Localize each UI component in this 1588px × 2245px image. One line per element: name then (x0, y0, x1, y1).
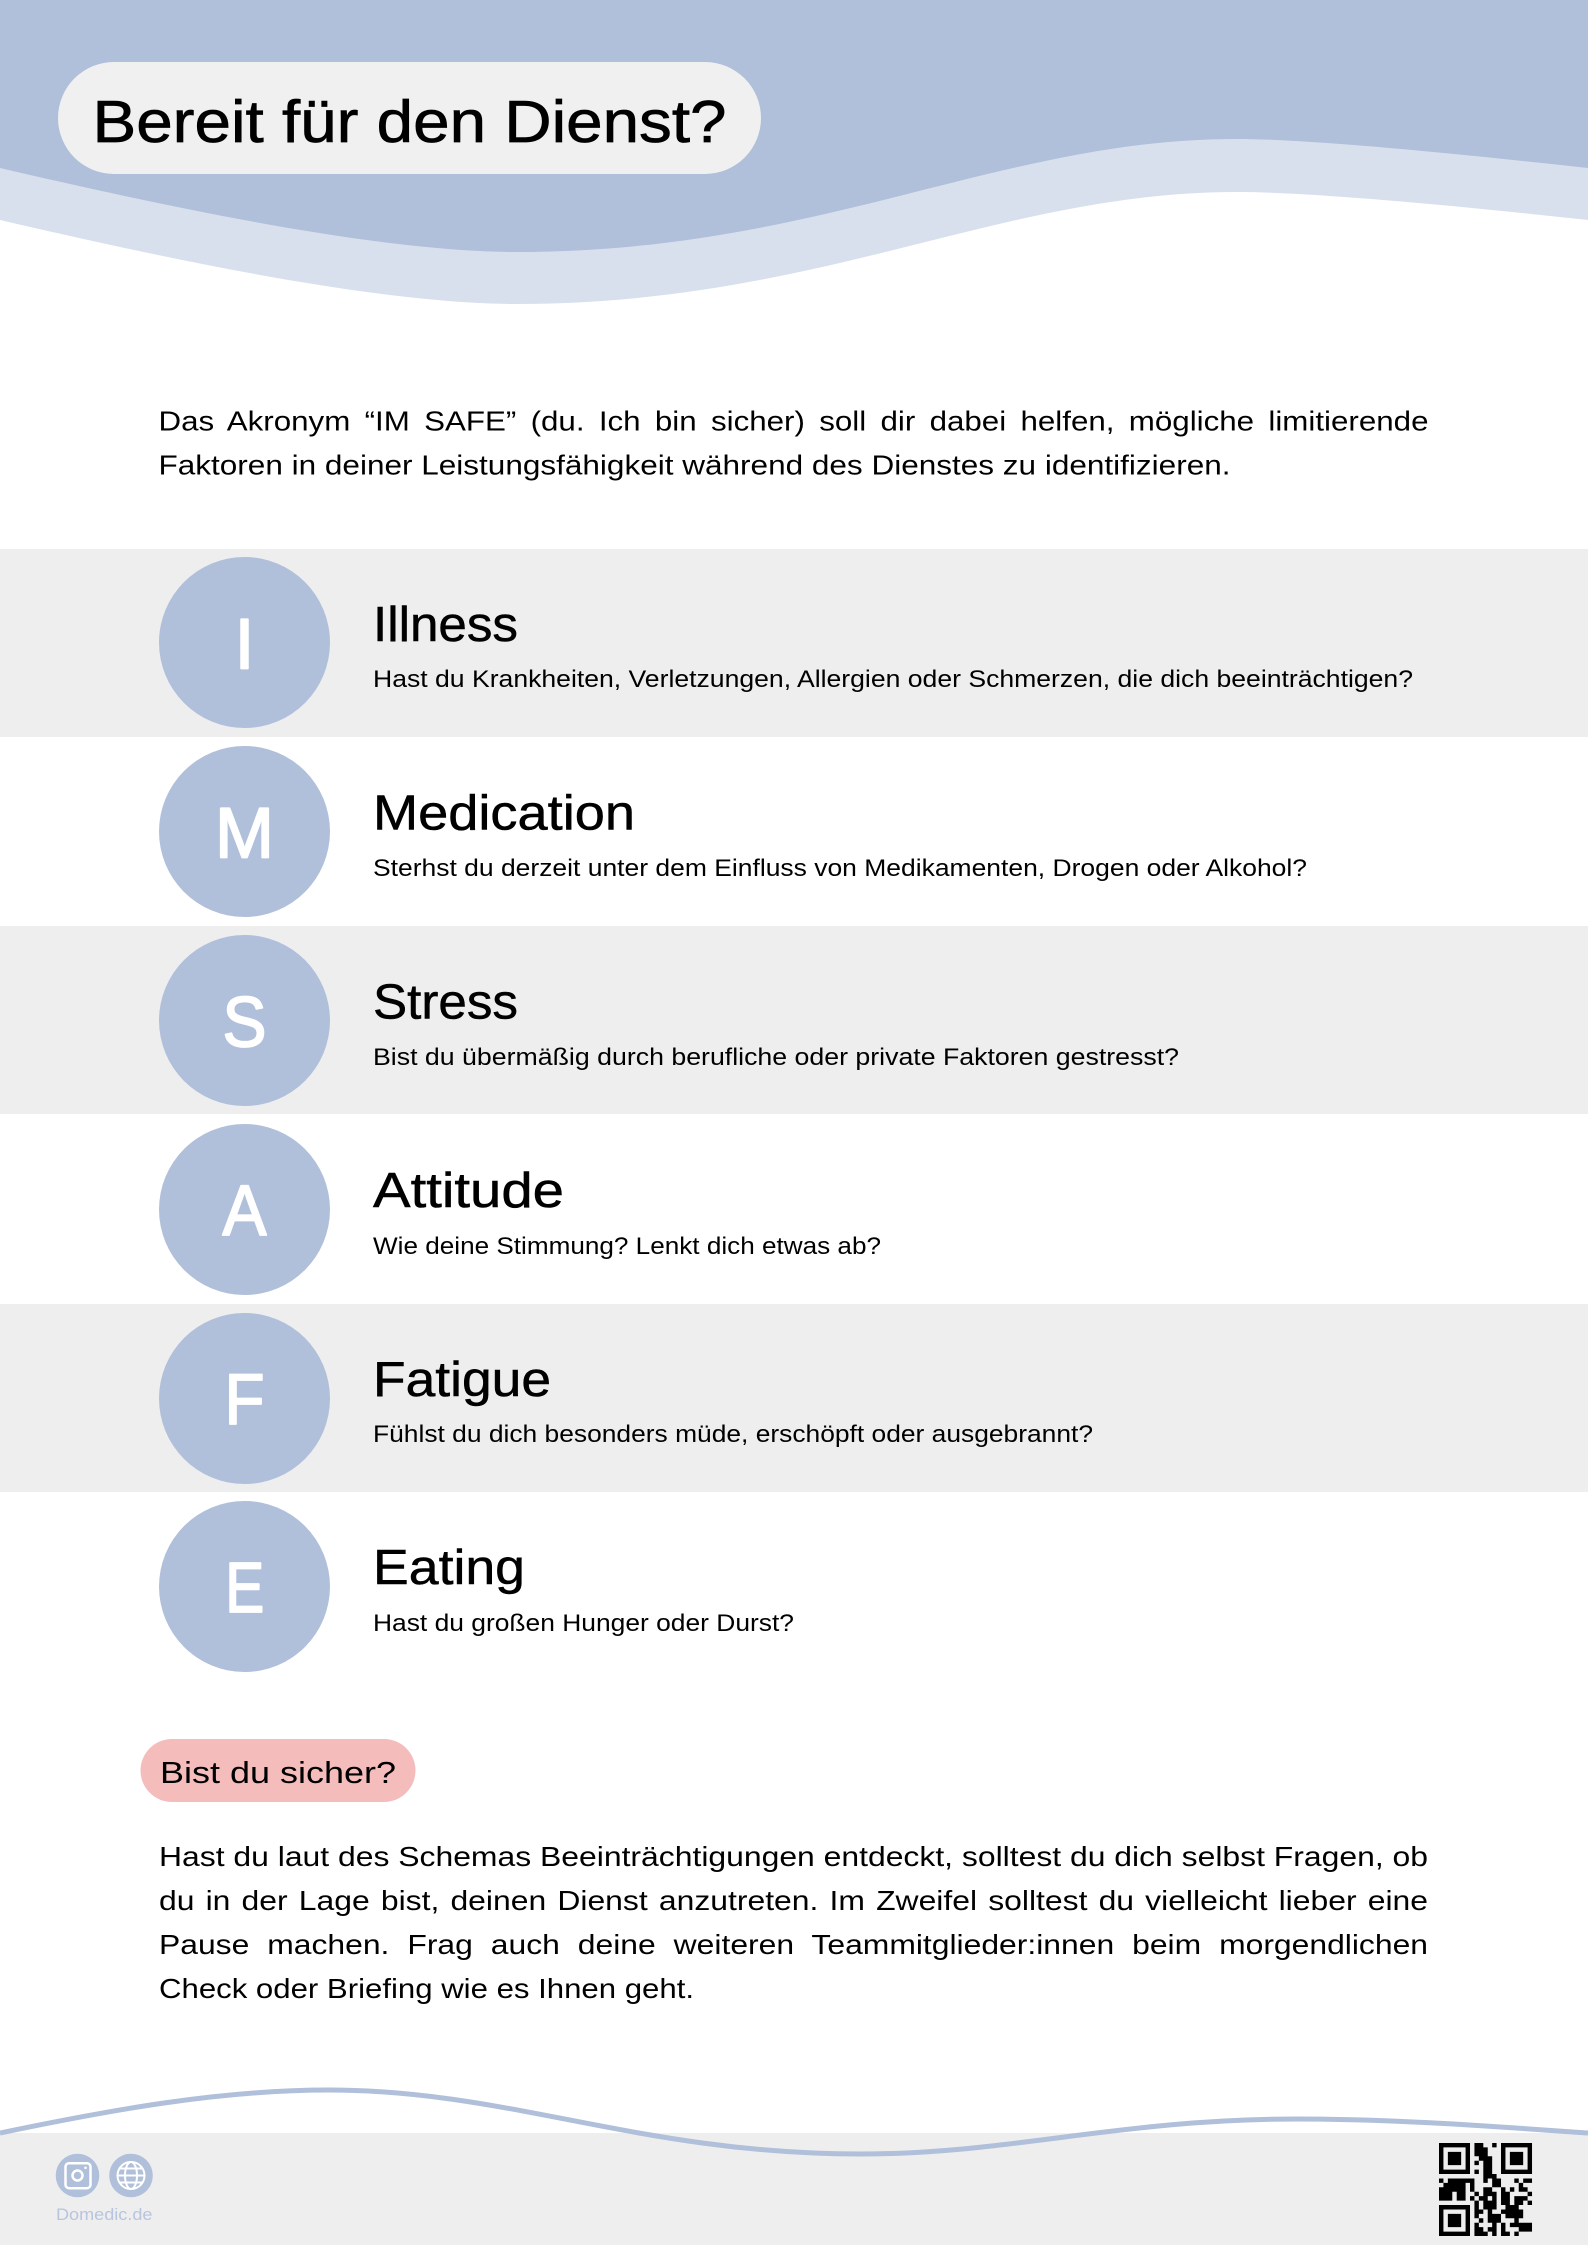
panel: Illness row (0, 549, 1588, 737)
title pill (58, 62, 761, 174)
closing text block: Pause machen. Frag auch deine weiteren Teammitglieder:innen beim morgendlichen (159, 1929, 1428, 1960)
callout pill: Bist du sicher? (140, 1739, 416, 1802)
footer band (0, 2133, 1588, 2245)
website label: Domedic.de (56, 2205, 152, 2224)
panel: Fatigue row: F (224, 1361, 264, 1440)
title pill: Bereit für den Dienst? (92, 89, 726, 155)
callout pill: Bist du sicher?: Bist du sicher? (160, 1755, 396, 1790)
panel: Eating row: Eating (373, 1541, 525, 1595)
closing text block (159, 1841, 1428, 2004)
panel: Medication row (159, 746, 1307, 917)
panel: Eating row: E (225, 1549, 264, 1628)
intro text (158, 406, 1428, 480)
header wave background (0, 0, 1588, 304)
panel: Stress row: S (222, 984, 266, 1062)
panel: Illness row: Hast du Krankheiten, Verletzungen, Allergien oder Schmerzen, die dich beeinträchtigen? (373, 666, 1413, 693)
panel: Fatigue row: Fühlst du dich besonders müde, erschöpft oder ausgebrannt? (373, 1421, 1093, 1448)
intro text: Faktoren in deiner Leistungsfähigkeit während des Dienstes zu identifizieren. (158, 450, 1230, 480)
panel: Medication row: M (215, 794, 274, 874)
closing text block: du in der Lage bist, deinen Dienst anzutreten. Im Zweifel solltest du vielleicht lieber eine (159, 1885, 1428, 1916)
panel: Stress row (0, 926, 1588, 1114)
panel: Eating row (159, 1501, 794, 1672)
panel: Attitude row: A (222, 1172, 267, 1251)
panel: Illness row: I (235, 606, 254, 684)
panel: Medication row: Medication (373, 786, 635, 840)
QR code (1439, 2143, 1532, 2236)
panel: Attitude row: Wie deine Stimmung? Lenkt dich etwas ab? (373, 1233, 881, 1260)
panel: Fatigue row (0, 1304, 1588, 1492)
panel: Stress row: Bist du übermäßig durch berufliche oder private Faktoren gestresst? (373, 1044, 1179, 1071)
icon: globe (109, 2154, 153, 2197)
panel: Stress row: Stress (373, 976, 518, 1030)
panel: Attitude row: Attitude (373, 1164, 564, 1218)
panel: Eating row: Hast du großen Hunger oder Durst? (373, 1610, 794, 1637)
icon: instagram (56, 2154, 99, 2197)
panel: Attitude row (159, 1124, 881, 1295)
panel: Fatigue row: Fatigue (373, 1353, 551, 1407)
panel: Illness row: Illness (373, 598, 518, 652)
panel: Medication row: Sterhst du derzeit unter dem Einfluss von Medikamenten, Drogen oder Alkohol? (373, 855, 1307, 882)
closing text block: Hast du laut des Schemas Beeinträchtigungen entdeckt, solltest du dich selbst Fragen, ob (159, 1841, 1428, 1872)
footer wave line (0, 2090, 1588, 2154)
closing text block: Check oder Briefing wie es Ihnen geht. (159, 1973, 694, 2004)
intro text: Das Akronym “IM SAFE” (du. Ich bin sicher) soll dir dabei helfen, mögliche limitierende (158, 406, 1428, 436)
